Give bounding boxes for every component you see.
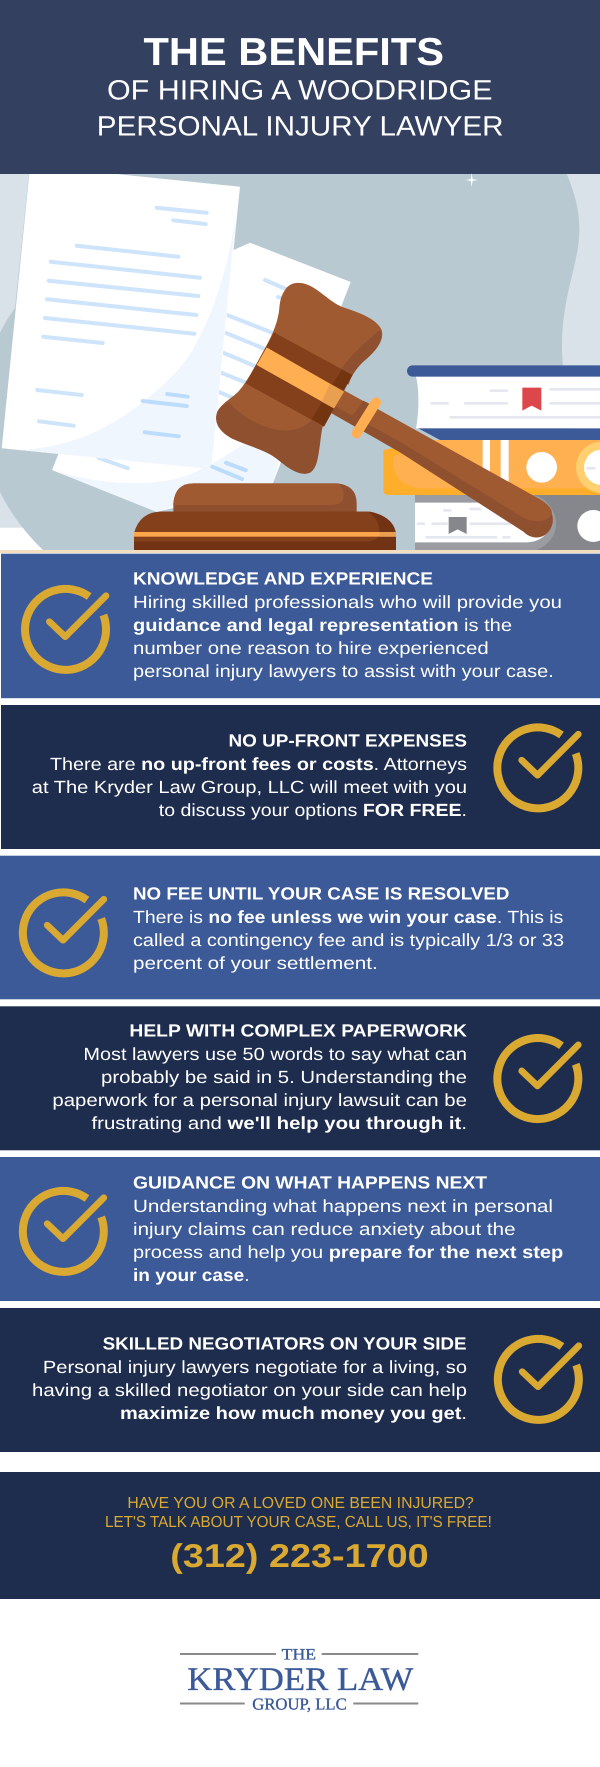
text block: Hiring skilled professionals who will provide you <box>133 592 562 612</box>
text block: injury claims can reduce anxiety about the <box>133 1219 516 1239</box>
text block: NO UP-FRONT EXPENSES <box>228 731 467 751</box>
gavel base <box>134 483 396 550</box>
text block: NO FEE UNTIL YOUR CASE IS RESOLVED <box>133 884 509 904</box>
icon: check circle <box>497 1038 578 1119</box>
text block: KNOWLEDGE AND EXPERIENCE <box>133 569 433 589</box>
icon: red bookmark <box>522 388 541 411</box>
text block: frustrating and we'll help you through it . <box>92 1113 467 1133</box>
table edge <box>0 550 600 553</box>
phone number: (312) 223-1700 <box>170 1537 429 1574</box>
title: OF HIRING A WOODRIDGE <box>107 74 493 105</box>
gavel ring <box>357 402 376 433</box>
panel: guidance on what happens next <box>0 1157 600 1301</box>
panel: skilled negotiators on your side <box>0 1308 600 1452</box>
title: THE BENEFITS <box>144 31 444 74</box>
text block: maximize how much money you get . <box>120 1403 467 1423</box>
text block: at The Kryder Law Group, LLC will meet with you <box>32 777 467 797</box>
panel: knowledge and experience <box>1 554 600 698</box>
text block: probably be said in 5. Understanding the <box>101 1067 467 1087</box>
text block: Personal injury lawyers negotiate for a living, so <box>43 1357 467 1377</box>
gavel head <box>216 283 382 474</box>
panel: no fee until your case is resolved <box>0 856 600 999</box>
icon: grey bookmark <box>449 517 467 534</box>
text block: There are no up-front fees or costs . Attorneys <box>50 754 467 774</box>
title <box>97 31 504 142</box>
orange book <box>383 440 600 495</box>
front document <box>2 174 240 468</box>
text block: process and help you prepare for the next step <box>133 1242 564 1262</box>
logo: The Kryder Law Group, LLC <box>180 1646 418 1713</box>
text block <box>133 1173 564 1285</box>
icon: check circle <box>497 727 578 808</box>
text block: Most lawyers use 50 words to say what can <box>83 1044 467 1064</box>
background blob <box>0 174 600 550</box>
text block: percent of your settlement. <box>133 953 378 973</box>
text block: guidance and legal representation is the <box>133 615 512 635</box>
logo: The Kryder Law Group, LLC: GROUP, LLC <box>252 1694 347 1713</box>
gavel handle <box>330 383 553 537</box>
back document <box>52 243 351 512</box>
text block <box>32 1334 467 1423</box>
icon: check circle <box>498 1339 579 1420</box>
text block: HELP WITH COMPLEX PAPERWORK <box>129 1021 467 1041</box>
text block <box>52 1021 467 1133</box>
text block: Understanding what happens next in personal <box>133 1196 553 1216</box>
top book <box>416 377 600 428</box>
icon: check circle <box>23 1191 104 1272</box>
panel: help with complex paperwork <box>0 1006 600 1150</box>
text block: personal injury lawyers to assist with your case. <box>133 661 554 681</box>
logo: The Kryder Law Group, LLC: KRYDER LAW <box>187 1662 414 1698</box>
header banner <box>0 0 600 174</box>
call to action text line 2: LET'S TALK ABOUT YOUR CASE, CALL US, IT'S FREE! <box>105 1514 492 1531</box>
text block: There is no fee unless we win your case . This is <box>133 907 564 927</box>
illustration: gavel, documents and books <box>0 173 600 553</box>
text block: to discuss your options FOR FREE . <box>159 800 467 820</box>
grey book <box>415 495 600 550</box>
text block <box>133 569 562 681</box>
call to action banner <box>0 1472 600 1599</box>
text block: in your case . <box>133 1265 249 1285</box>
panel: no up-front expenses <box>1 705 600 849</box>
text block: called a contingency fee and is typically 1/3 or 33 <box>133 930 564 950</box>
books <box>383 365 600 550</box>
icon: check circle <box>23 892 104 973</box>
icon: sparkle <box>465 173 478 187</box>
text block <box>133 884 564 973</box>
text block <box>32 731 467 820</box>
text block: SKILLED NEGOTIATORS ON YOUR SIDE <box>103 1334 467 1354</box>
call to action text: HAVE YOU OR A LOVED ONE BEEN INJURED? <box>127 1495 474 1512</box>
text block: having a skilled negotiator on your side can help <box>32 1380 467 1400</box>
logo: The Kryder Law Group, LLC: THE <box>282 1646 316 1663</box>
text block: number one reason to hire experienced <box>133 638 489 658</box>
title: PERSONAL INJURY LAWYER <box>97 111 504 142</box>
icon: check circle <box>25 589 106 670</box>
text block: GUIDANCE ON WHAT HAPPENS NEXT <box>133 1173 487 1193</box>
text block: paperwork for a personal injury lawsuit can be <box>52 1090 467 1110</box>
